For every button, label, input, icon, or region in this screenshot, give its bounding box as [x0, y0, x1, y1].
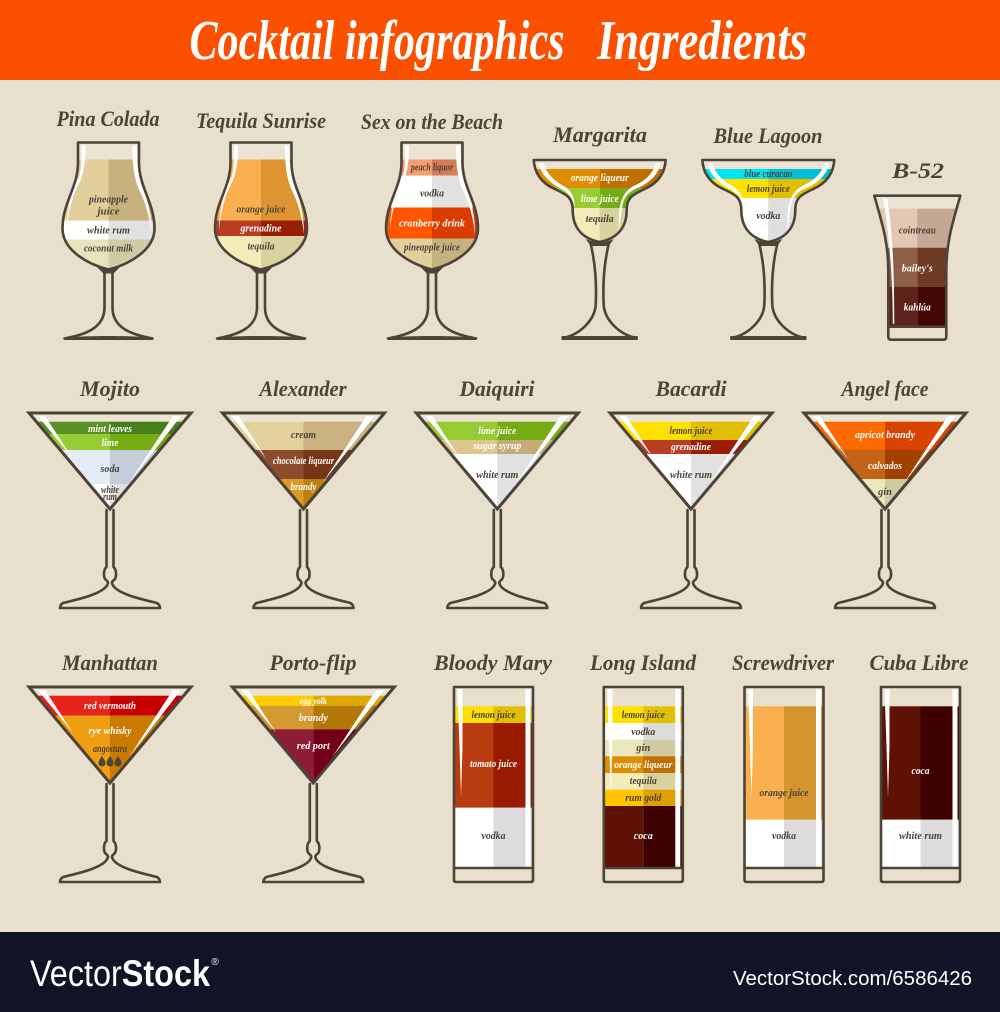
label: chocolate liqueur: chocolate liqueur — [273, 456, 335, 467]
label: white rum — [101, 485, 119, 503]
label: egg yolk: egg yolk — [300, 696, 327, 706]
cocktail: Blue Lagoon — [698, 123, 838, 340]
name: Long Island: Long Island — [589, 650, 697, 675]
label: rye whisky: rye whisky — [88, 726, 132, 737]
name: Porto-flip: Porto-flip — [269, 650, 356, 675]
cocktail: Manhattan — [20, 650, 200, 882]
glass: highball — [739, 687, 829, 882]
title: Ingredients: Ingredients — [596, 10, 807, 72]
glass: martini — [20, 413, 200, 608]
glass: snifter — [384, 141, 480, 340]
name: Bloody Mary: Bloody Mary — [433, 650, 552, 675]
glass: coupe — [698, 160, 838, 340]
label: red vermouth: red vermouth — [84, 701, 136, 712]
footer bar — [0, 932, 1000, 1012]
cocktail: Angel face — [795, 376, 975, 608]
label: lemon juice: lemon juice — [472, 710, 516, 721]
cocktail: Long Island — [589, 650, 697, 882]
label: kahlúa: kahlúa — [904, 303, 931, 314]
label: grenadine: grenadine — [670, 442, 711, 453]
name: Angel face: Angel face — [840, 376, 929, 401]
image id: VectorStock.com/6586426 — [733, 968, 972, 990]
label: brandy: brandy — [290, 482, 317, 493]
logo: registered mark: ® — [211, 957, 219, 968]
cocktail: Pina Colada — [56, 110, 159, 340]
label: gin: gin — [635, 743, 650, 754]
cocktail: Mojito — [20, 376, 200, 608]
name: Daiquiri: Daiquiri — [459, 376, 535, 401]
label: blue curacao: blue curacao — [744, 169, 792, 180]
label: tequila: tequila — [630, 776, 657, 787]
header banner — [0, 0, 1000, 80]
glass: highball — [876, 687, 966, 882]
label: coca: coca — [634, 831, 653, 842]
label: vodka: vodka — [756, 211, 780, 222]
cocktail: Bacardi — [601, 376, 781, 608]
name: Manhattan: Manhattan — [61, 650, 158, 675]
name: Tequila Sunrise: Tequila Sunrise — [196, 108, 326, 133]
label: cream: cream — [291, 430, 316, 441]
cocktail: Cuba Libre — [870, 650, 969, 882]
label: brandy: brandy — [299, 713, 328, 724]
cocktail: B-52 — [873, 164, 962, 341]
label: white rum: white rum — [899, 831, 942, 842]
name: Cuba Libre: Cuba Libre — [870, 650, 969, 675]
label: grenadine: grenadine — [240, 224, 282, 234]
name: Margarita: Margarita — [552, 122, 647, 147]
label: apricot brandy: apricot brandy — [855, 430, 915, 441]
label: red port: red port — [297, 741, 331, 752]
glass: highball — [598, 687, 688, 882]
label: sugar syrup: sugar syrup — [472, 441, 521, 452]
title: Cocktail infographics: Cocktail infographics — [190, 10, 564, 72]
label: pineapple juice: pineapple juice — [403, 242, 460, 254]
name: Mojito: Mojito — [79, 376, 140, 401]
label: lemon juice: lemon juice — [747, 184, 790, 195]
label: white rum: white rum — [87, 226, 130, 236]
label: rum gold: rum gold — [625, 793, 662, 804]
cocktail: Margarita — [530, 122, 670, 340]
label: orange juice: orange juice — [760, 788, 809, 799]
label: calvados: calvados — [868, 461, 902, 472]
label: lemon juice: lemon juice — [622, 710, 665, 721]
label: coconut milk: coconut milk — [84, 244, 134, 254]
name: Alexander: Alexander — [258, 376, 347, 401]
cocktail: Porto-flip — [223, 650, 403, 882]
label: pineapple juice: pineapple — [88, 194, 128, 206]
label: angostura: angostura — [93, 744, 127, 755]
label: coca: coca — [912, 766, 930, 777]
cocktail: Alexander — [214, 376, 394, 608]
label: lemon juice: lemon juice — [670, 426, 713, 437]
glass: martini — [223, 687, 403, 882]
label: cranberry drink: cranberry drink — [399, 218, 466, 230]
name: Blue Lagoon: Blue Lagoon — [713, 123, 822, 148]
label: vodka: vodka — [420, 188, 444, 200]
name: Screwdriver: Screwdriver — [732, 650, 834, 675]
label: orange liqueur: orange liqueur — [571, 173, 630, 184]
label: lime juice: lime juice — [581, 194, 619, 205]
name: B-52: B-52 — [891, 158, 944, 183]
cocktail: Sex on the Beach — [361, 109, 503, 340]
glass: martini — [601, 413, 781, 608]
icon: three drops — [98, 756, 122, 766]
label: vodka: vodka — [631, 727, 655, 738]
label: soda: soda — [100, 464, 120, 475]
glass: coupe — [530, 160, 670, 340]
glass: martini — [20, 687, 200, 882]
label: pineapple juice: juice — [95, 206, 120, 218]
label: white rum: white rum — [476, 470, 518, 481]
name: Pina Colada: Pina Colada — [56, 106, 160, 131]
cocktail: Daiquiri — [407, 376, 587, 608]
name: Bacardi: Bacardi — [655, 376, 727, 401]
cocktail: Screwdriver — [732, 650, 834, 882]
label: pineapple juice — [88, 194, 128, 218]
cocktail: Bloody Mary — [433, 650, 552, 882]
label: vodka: vodka — [482, 831, 506, 842]
label: cointreau: cointreau — [899, 226, 936, 237]
label: tomato juice: tomato juice — [470, 759, 517, 770]
label: white rum: rum — [103, 492, 117, 503]
glass: martini — [795, 413, 975, 608]
label: lime: lime — [102, 438, 119, 449]
logo: VectorStock: VectorStock — [30, 953, 210, 994]
label: tequila: tequila — [248, 242, 274, 252]
glass: highball — [448, 687, 538, 882]
label: gin: gin — [877, 487, 892, 498]
glass: shot — [867, 196, 967, 340]
label: peach liquor: peach liquor — [410, 162, 454, 174]
label: white rum: white — [101, 485, 119, 496]
cocktail: Tequila Sunrise — [196, 108, 326, 340]
glass: snifter — [61, 141, 156, 340]
label: bailey's: bailey's — [902, 264, 933, 275]
label: orange juice: orange juice — [236, 204, 286, 216]
label: lime juice: lime juice — [478, 426, 517, 437]
name: Sex on the Beach: Sex on the Beach — [361, 109, 503, 134]
label: orange liqueur: orange liqueur — [614, 760, 673, 771]
label: white rum: white rum — [670, 470, 712, 481]
glass: snifter — [214, 141, 308, 340]
glass: martini — [407, 413, 587, 608]
glass: martini — [214, 413, 394, 608]
label: vodka: vodka — [772, 831, 796, 842]
label: tequila: tequila — [586, 214, 614, 225]
label: mint leaves: mint leaves — [88, 424, 132, 435]
